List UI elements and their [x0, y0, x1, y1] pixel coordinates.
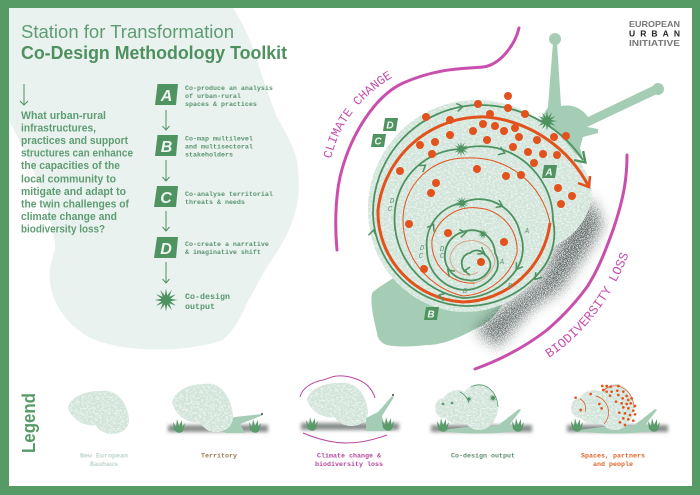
badge C on shell: C [374, 136, 382, 148]
snail head and tentacles [540, 33, 664, 162]
spiral direction arrows [369, 103, 590, 301]
step D: & imaginative shift [185, 249, 261, 257]
arrow: A to B [162, 110, 170, 130]
guiding question text: practices and support [21, 135, 128, 147]
guiding question text [21, 110, 133, 236]
legend item: New European Bauhaus: Bauhaus [90, 461, 118, 469]
step B: stakeholders [185, 152, 233, 160]
legend item: Spaces, partners and people: Spaces, partners [581, 452, 645, 460]
badge A on shell [542, 165, 557, 178]
arrow: C to D [162, 211, 170, 231]
guiding question text: infrastructures, [21, 122, 96, 134]
arrow: down to question [20, 84, 28, 105]
step B [155, 135, 253, 160]
small spiral step letters: D [390, 198, 395, 206]
small spiral step letters: C [440, 253, 445, 261]
snail foot [371, 278, 503, 346]
legend item: Co-design output: Co-design output [451, 452, 515, 460]
climate change arc [336, 28, 519, 250]
step C [154, 186, 273, 207]
legend item: Climate change and biodiversity loss: Climate change & [317, 452, 381, 460]
badge D on shell [383, 118, 398, 132]
small spiral step letters: B [508, 283, 512, 291]
title [21, 21, 287, 63]
step C: threats & needs [185, 199, 245, 207]
snail shell [368, 100, 592, 312]
small spiral step letters: C [419, 253, 424, 261]
biodiversity loss arc [475, 155, 627, 369]
logo: European Urban Initiative: URBAN [629, 28, 680, 38]
step D: Co-create a narrative [185, 241, 269, 249]
title: Station for Transformation [21, 21, 234, 42]
faint inner orange spiral [450, 241, 495, 283]
step D [154, 237, 269, 258]
green spiral [373, 105, 583, 306]
small spiral step letters: A [524, 228, 529, 236]
small spiral step letters: D [440, 246, 445, 254]
badge B on foot [424, 307, 439, 320]
logo: European Urban Initiative: INITIATIVE [629, 38, 680, 48]
co-design output stars [454, 111, 557, 239]
badge C on shell [371, 134, 386, 148]
small spiral step letters: D [420, 245, 425, 253]
biodiversity loss label: BIODIVERSITY LOSS [545, 252, 628, 358]
arrow: B to C [162, 160, 170, 181]
legend item: Spaces, partners and people: and people [593, 461, 633, 469]
step B: B [161, 139, 172, 156]
legend item: New European Bauhaus: New European [80, 452, 128, 460]
light green background blob [9, 8, 299, 350]
orange arrowhead [578, 176, 590, 187]
step A [155, 84, 273, 109]
badge A on shell: A [544, 168, 553, 178]
guiding question text: the twin challenges of [21, 198, 129, 210]
legend item: Climate change and biodiversity loss: biodiversity loss [315, 461, 383, 469]
legend item: New European Bauhaus [68, 391, 129, 469]
badge B on foot: B [427, 310, 435, 320]
guiding question text: the capacities of the [21, 160, 120, 172]
climate change label: CLIMATE CHANGE [324, 70, 392, 158]
guiding question text: local community to [21, 174, 116, 186]
step B: and multisectoral [185, 144, 253, 152]
guiding question text: climate change and [21, 211, 117, 223]
guiding question text: biodiversity loss? [21, 224, 105, 236]
snail illustration [368, 33, 664, 347]
logo: European Urban Initiative: EUROPEAN [629, 19, 680, 29]
legend item: Territory [168, 384, 268, 460]
orange dots: spaces, partners and people [396, 92, 576, 273]
co-design output key: output [185, 302, 215, 312]
step A: A [160, 88, 172, 105]
legend item: Co-design output [431, 384, 532, 460]
legend item: Climate change and biodiversity loss [300, 376, 399, 469]
legend item: Territory: Territory [201, 452, 237, 460]
title: Co-Design Methodology Toolkit [21, 42, 287, 63]
logo: European Urban Initiative [629, 19, 680, 48]
small spiral step letters: B [463, 288, 467, 296]
step D: D [160, 241, 172, 258]
step A: Co-produce an analysis [185, 85, 273, 93]
step C: C [160, 190, 172, 207]
guiding question text: mitigate and adapt to [21, 186, 126, 198]
degraded territory speckle [475, 197, 603, 347]
thin orange spiral [403, 158, 550, 296]
small spiral step letters: C [388, 206, 393, 214]
co-design output key: Co-design [185, 292, 230, 302]
step B: Co-map multilevel [185, 136, 253, 144]
guiding question text: What urban-rural [21, 110, 106, 122]
step A: of urban-rural [185, 93, 241, 101]
arrow: D to output [162, 262, 170, 283]
guiding question text: structures can enhance [21, 148, 133, 160]
thick orange spiral [378, 117, 589, 302]
legend heading: Legend [19, 393, 39, 453]
badge D on shell: D [386, 120, 394, 132]
small spiral step letters [388, 198, 529, 296]
step C: Co-analyse territorial [185, 191, 273, 199]
step A: spaces & practices [185, 101, 257, 109]
small spiral step letters: A [499, 259, 504, 267]
legend item: Spaces, partners and people [567, 384, 668, 469]
co-design output key [154, 288, 230, 312]
